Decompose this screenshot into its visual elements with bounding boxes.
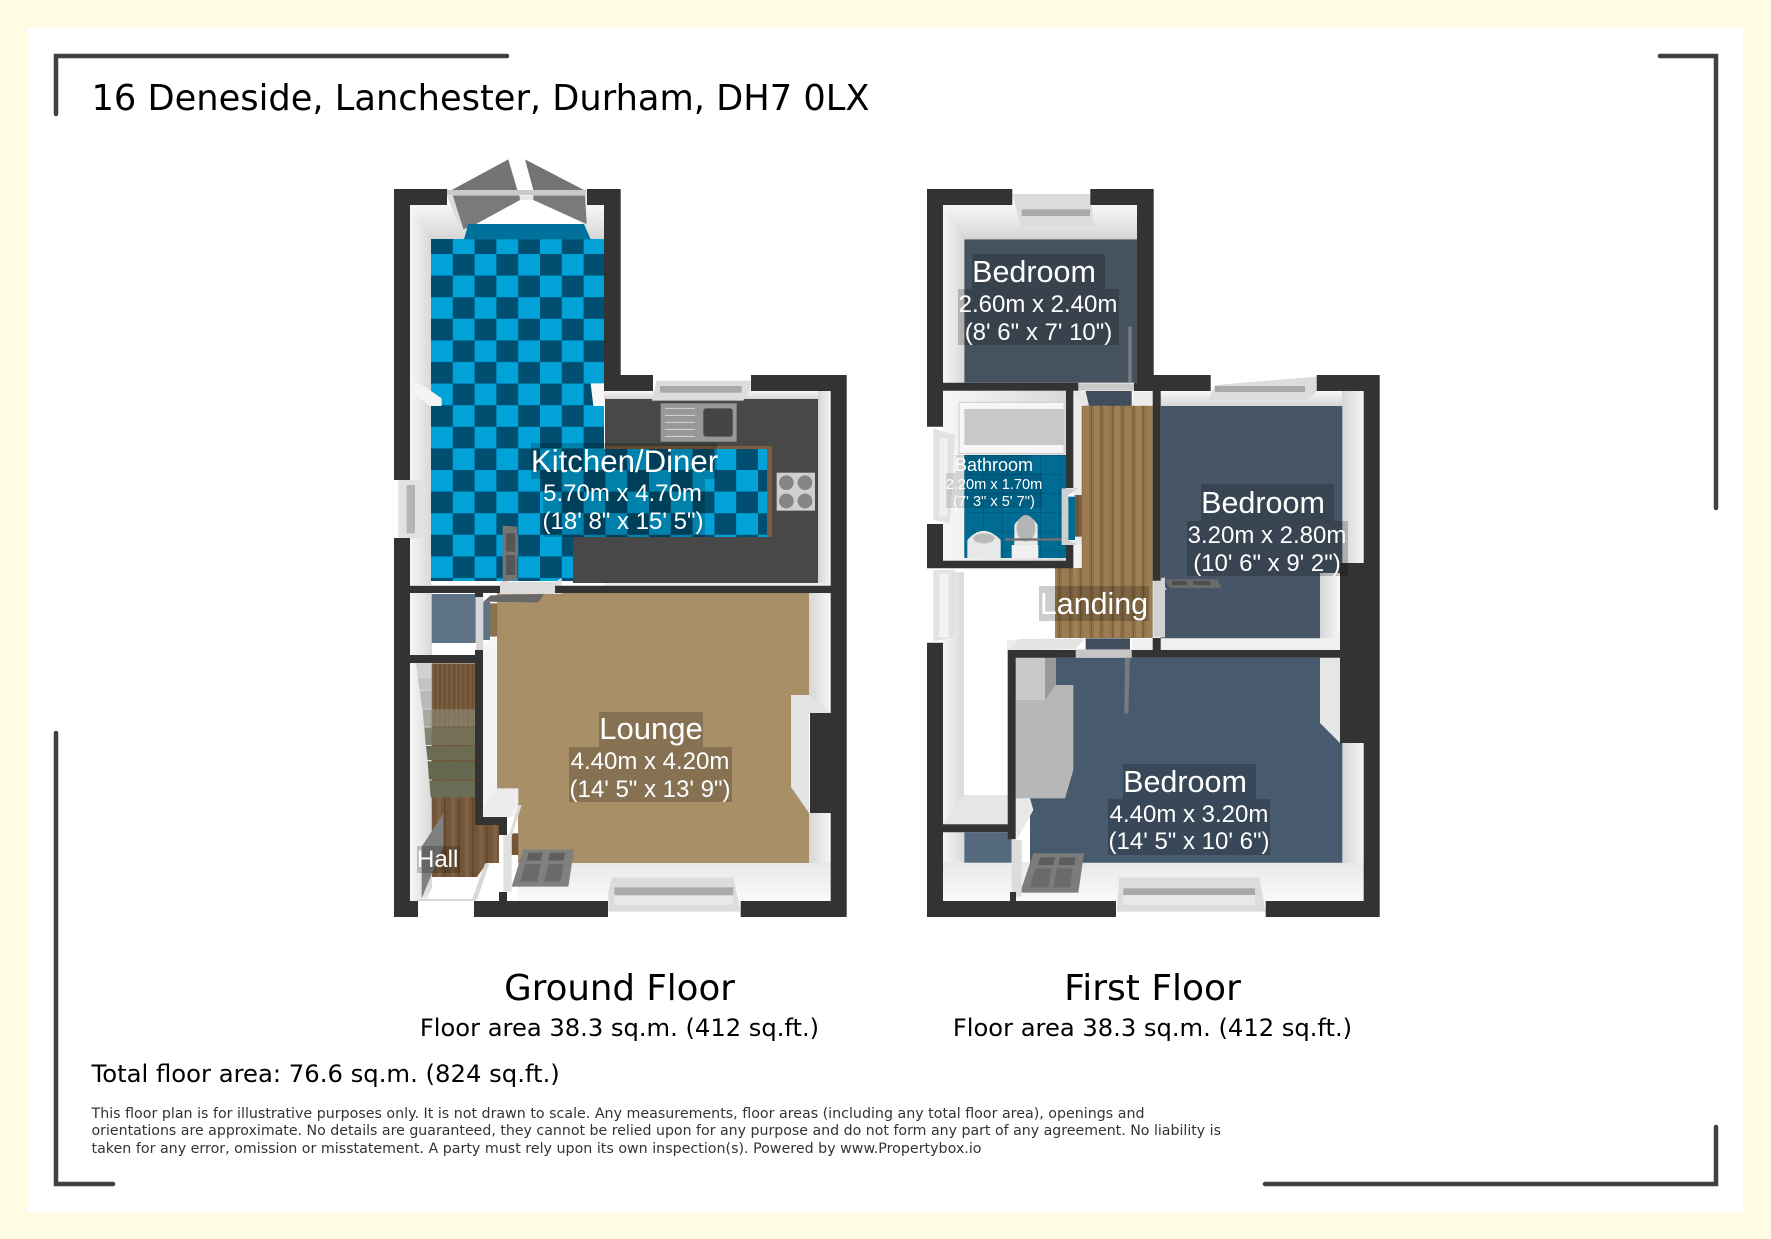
room label: Bathroom: 2.20m x 1.70m [946,477,1042,493]
bay doors: kitchen top [447,159,591,239]
fireplace ledge [483,788,518,817]
door: bedroom lower [1124,658,1130,713]
landing floor [1055,406,1153,638]
door: hall [422,813,443,898]
window: bedroom top [1012,194,1094,227]
door post [1012,840,1022,897]
pillar right [591,383,604,406]
room label: Bedroom right: Bedroom [1201,486,1325,520]
heading: Ground Floor: Ground Floor [504,968,735,1009]
floor plan: first floor [927,189,1380,917]
corner bracket: top right [1660,56,1716,508]
room label: Bathroom [946,455,1042,510]
cupboard floor [432,594,476,643]
room label: Bedroom bottom: (14' 5" x 10' 6") [1109,828,1269,855]
door: kitchen [503,526,517,582]
wall faces: ground floor [410,205,831,901]
room label: Bedroom right: (10' 6" x 9' 2") [1193,550,1341,577]
room label: Bedroom bottom [1108,764,1270,855]
room label: Kitchen/Diner: Kitchen/Diner [531,444,718,479]
room label: Bathroom: (7' 3" x 5' 7") [953,494,1035,510]
corner bracket: top left [56,56,507,114]
door: bathroom [1005,538,1062,541]
door frame: bathroom [1062,488,1078,545]
closet floor [964,832,1012,863]
bedroom floor [1161,406,1342,638]
chimney breast [1016,658,1073,798]
bath [959,402,1064,453]
staircase [416,663,475,797]
basin [967,531,1001,558]
corner bracket: bottom right [1265,1127,1716,1184]
first floor fittings [933,194,1317,590]
bedroom floor [964,239,1137,383]
window: bedroom bottom [1117,877,1266,912]
door: bedroom right lower [1165,579,1222,588]
sink [661,403,737,442]
window: bedroom right [1208,377,1317,400]
door: lounge bottom [512,849,574,887]
room label: Bathroom: Bathroom [955,455,1033,475]
hall wood floor [432,797,499,877]
disclaimer [91,1106,1221,1157]
room label: Bedroom top [958,254,1119,346]
room label: Landing: Landing [1040,587,1148,621]
bedroom floor [1030,658,1342,863]
disclaimer: orientations are approximate. No details are guaranteed, they cannot be relied upon for any purpose and do not form any part of any agreement. No liability is [92,1123,1221,1139]
lounge carpet [497,593,809,863]
room label: Lounge: 4.40m x 4.20m [571,748,729,775]
disclaimer: taken for any error, omission or misstatement. A party must rely upon its own inspection(s). Powered by www.Propertybox.io [92,1141,982,1157]
room label: Bedroom top: 2.60m x 2.40m [959,291,1117,318]
door frame [1076,649,1132,658]
room label: Lounge: (14' 5" x 13' 9") [570,776,730,803]
window: kitchen top [652,381,751,401]
title: 16 Deneside, Lanchester, Durham, DH7 0LX [92,78,870,119]
room label: Bedroom bottom: Bedroom [1123,765,1247,799]
wall faces: first floor [943,205,1364,901]
lounge fittings [417,594,741,917]
threshold [499,578,562,594]
window: side [933,570,955,642]
door passage [1086,391,1132,406]
floor area: first floor: Floor area 38.3 sq.m. (412 sq.ft.) [953,1014,1352,1042]
room label: Kitchen/Diner: 5.70m x 4.70m [543,480,702,507]
kitchen worktop [573,399,818,583]
room label: Lounge [569,711,732,803]
room label: Bedroom right [1187,484,1348,577]
bathroom tiled floor [964,455,1066,558]
floor area: ground floor: Floor area 38.3 sq.m. (412 sq.ft.) [420,1014,819,1042]
door post [503,835,512,892]
door: bedroom right [1158,573,1167,590]
worktop edge [606,446,772,537]
door jambs [1074,392,1089,406]
toilet [1012,515,1038,558]
room label: Bedroom top: (8' 6" x 7' 10") [965,319,1112,346]
heading: First Floor: First Floor [1064,968,1241,1009]
door passage [1086,638,1130,650]
window: kitchen left [398,480,423,538]
total floor area: Total floor area: 76.6 sq.m. (824 sq.ft.) [90,1059,560,1088]
kitchen checker floor [431,239,767,581]
hob [777,473,815,511]
window: lounge [608,877,741,912]
room label: Kitchen/Diner [531,443,718,537]
door: bedroom [1128,327,1132,383]
floor plan: ground floor [394,159,847,917]
door: bedroom bottom [1020,853,1084,893]
room label: Kitchen/Diner: (18' 8" x 15' 5") [543,508,703,535]
window: bathroom [933,428,955,523]
hall threshold [417,863,489,917]
room label: Bedroom right: 3.20m x 2.80m [1188,522,1346,549]
kitchen fittings [398,381,815,594]
room label: Bedroom top: Bedroom [972,255,1096,289]
room label: Bedroom bottom: 4.40m x 3.20m [1110,801,1268,828]
walls: ground floor [394,189,847,917]
door: lounge top [483,594,544,602]
corner bracket: bottom left [56,733,113,1184]
disclaimer: This floor plan is for illustrative purposes only. It is not drawn to scale. Any measurements, floor areas (including any total floor area), openings and [91,1106,1145,1122]
jamb [1008,638,1085,650]
walls: first floor [927,189,1380,917]
room label: Lounge: Lounge [599,711,703,746]
door post [1153,577,1165,637]
door frame [1078,383,1134,391]
pillar left [410,383,442,406]
room label: Hall: Hall [417,846,458,873]
